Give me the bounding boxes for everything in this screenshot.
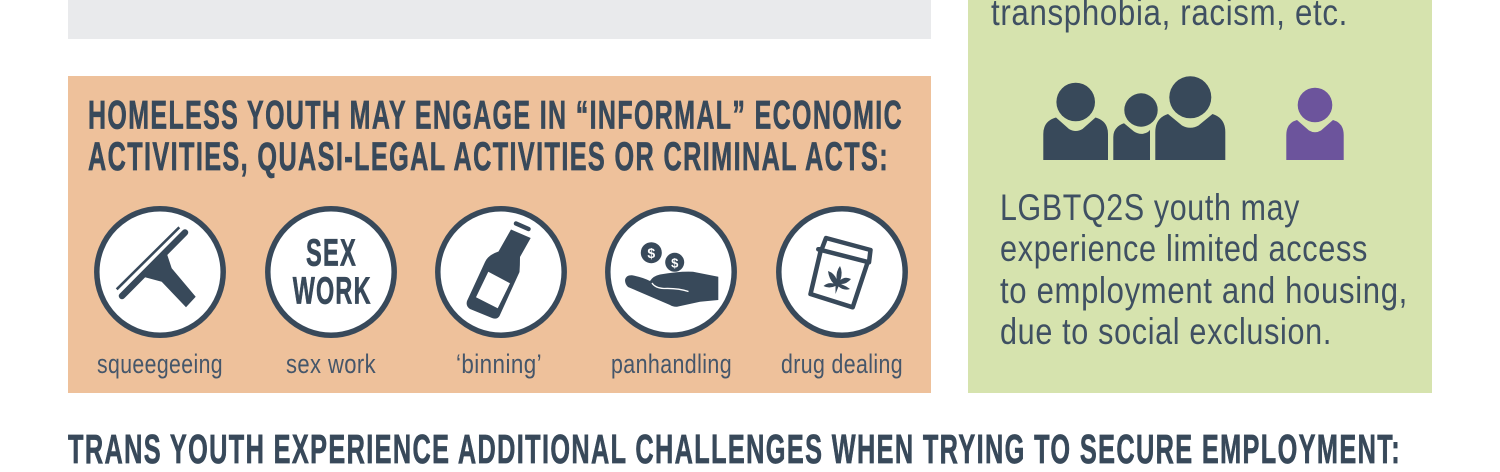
label: binning: ‘binning’: [456, 349, 542, 379]
icon: hand with coins: $: [647, 245, 655, 261]
icon: squeegee: [97, 209, 223, 335]
label: drug dealing: drug dealing: [781, 349, 903, 379]
icon: hand with coins: [608, 209, 734, 335]
text: LGBTQ2S exclusion: experience limited access: [1000, 228, 1368, 269]
text: LGBTQ2S exclusion: due to social exclusion.: [1000, 311, 1332, 352]
icon: sex work: [268, 209, 394, 335]
text: LGBTQ2S exclusion: LGBTQ2S youth may: [1000, 187, 1300, 228]
icon: group of people: [1043, 76, 1225, 160]
label: sex work: sex work: [286, 349, 376, 379]
panel: grey box: [68, 0, 931, 39]
icon: hand with coins: $: [671, 256, 679, 270]
text: LGBTQ2S exclusion: [1000, 187, 1408, 352]
heading: informal activities: HOMELESS YOUTH MAY ENGAGE IN “INFORMAL” ECONOMIC: [88, 94, 903, 138]
icon: purple person: [1286, 88, 1344, 160]
icon: sex work: SEX: [306, 233, 357, 275]
icon: sex work: WORK: [293, 270, 372, 312]
label: panhandling: panhandling: [611, 349, 732, 379]
label: squeegeeing: squeegeeing: [97, 349, 223, 379]
text: LGBTQ2S exclusion: to employment and housing,: [1000, 270, 1408, 311]
heading: informal activities: [88, 94, 903, 179]
icon: bottle: [438, 209, 564, 335]
icon: cannabis bag: [779, 209, 905, 335]
panel: LGBTQ2S youth: [968, 0, 1432, 393]
heading: informal activities: ACTIVITIES, QUASI-LEGAL ACTIVITIES OR CRIMINAL ACTS:: [88, 135, 889, 179]
panel: informal economic activities: [68, 76, 931, 393]
